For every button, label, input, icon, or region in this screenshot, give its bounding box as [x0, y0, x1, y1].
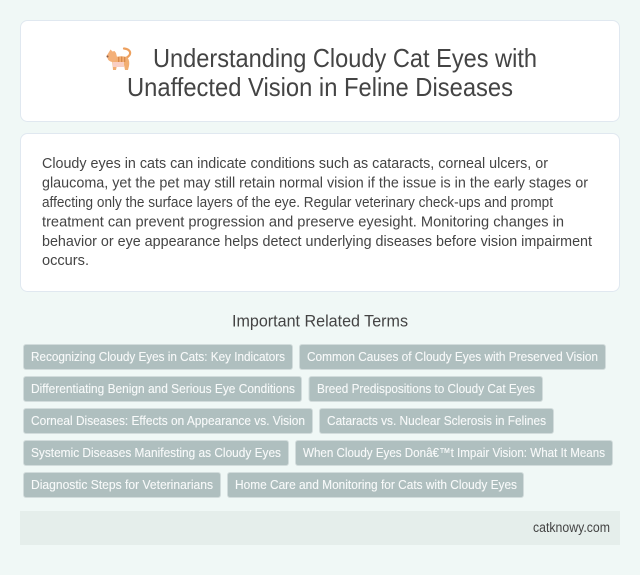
related terms tags: Recognizing Cloudy Eyes in Cats: Key Indicators [31, 349, 285, 364]
footer: catknowy.com [533, 520, 610, 535]
title: Unaffected Vision in Feline Diseases [127, 72, 513, 102]
description text [42, 155, 593, 269]
related terms tags: Differentiating Benign and Serious Eye Conditions [31, 381, 295, 396]
related terms tags: Corneal Diseases: Effects on Appearance vs. Vision [31, 413, 305, 428]
related terms tags: Breed Predispositions to Cloudy Cat Eyes [317, 381, 535, 396]
related terms tags [24, 344, 612, 498]
related terms tags: When Cloudy Eyes Donâ€™t Impair Vision: What It Means [303, 445, 605, 460]
title: Understanding Cloudy Cat Eyes with [153, 43, 537, 73]
description text: treatment can prevent progression and preserve eyesight. Monitoring changes in [42, 214, 564, 230]
related terms tags: Cataracts vs. Nuclear Sclerosis in Felines [327, 413, 546, 428]
title [127, 43, 537, 102]
icon: cat [106, 48, 130, 70]
footer [20, 511, 620, 545]
related terms tags: Systemic Diseases Manifesting as Cloudy Eyes [31, 445, 281, 460]
panel: title card [20, 20, 620, 122]
related terms tags: Diagnostic Steps for Veterinarians [31, 477, 213, 492]
description text: occurs. [42, 252, 89, 269]
description text: glaucoma, yet the pet may still retain normal vision if the issue is in the early stages or [42, 174, 588, 192]
description text: Cloudy eyes in cats can indicate conditions such as cataracts, corneal ulcers, or [42, 155, 548, 172]
related terms tags: Home Care and Monitoring for Cats with Cloudy Eyes [235, 477, 517, 492]
panel: description card [20, 134, 620, 292]
related terms tags: Common Causes of Cloudy Eyes with Preserved Vision [307, 349, 598, 364]
description text: affecting only the surface layers of the eye. Regular veterinary check-ups and prompt [42, 194, 554, 211]
description text: behavior or eye appearance helps detect underlying diseases before vision impairment [42, 233, 593, 250]
heading: related terms: Important Related Terms [232, 312, 408, 330]
